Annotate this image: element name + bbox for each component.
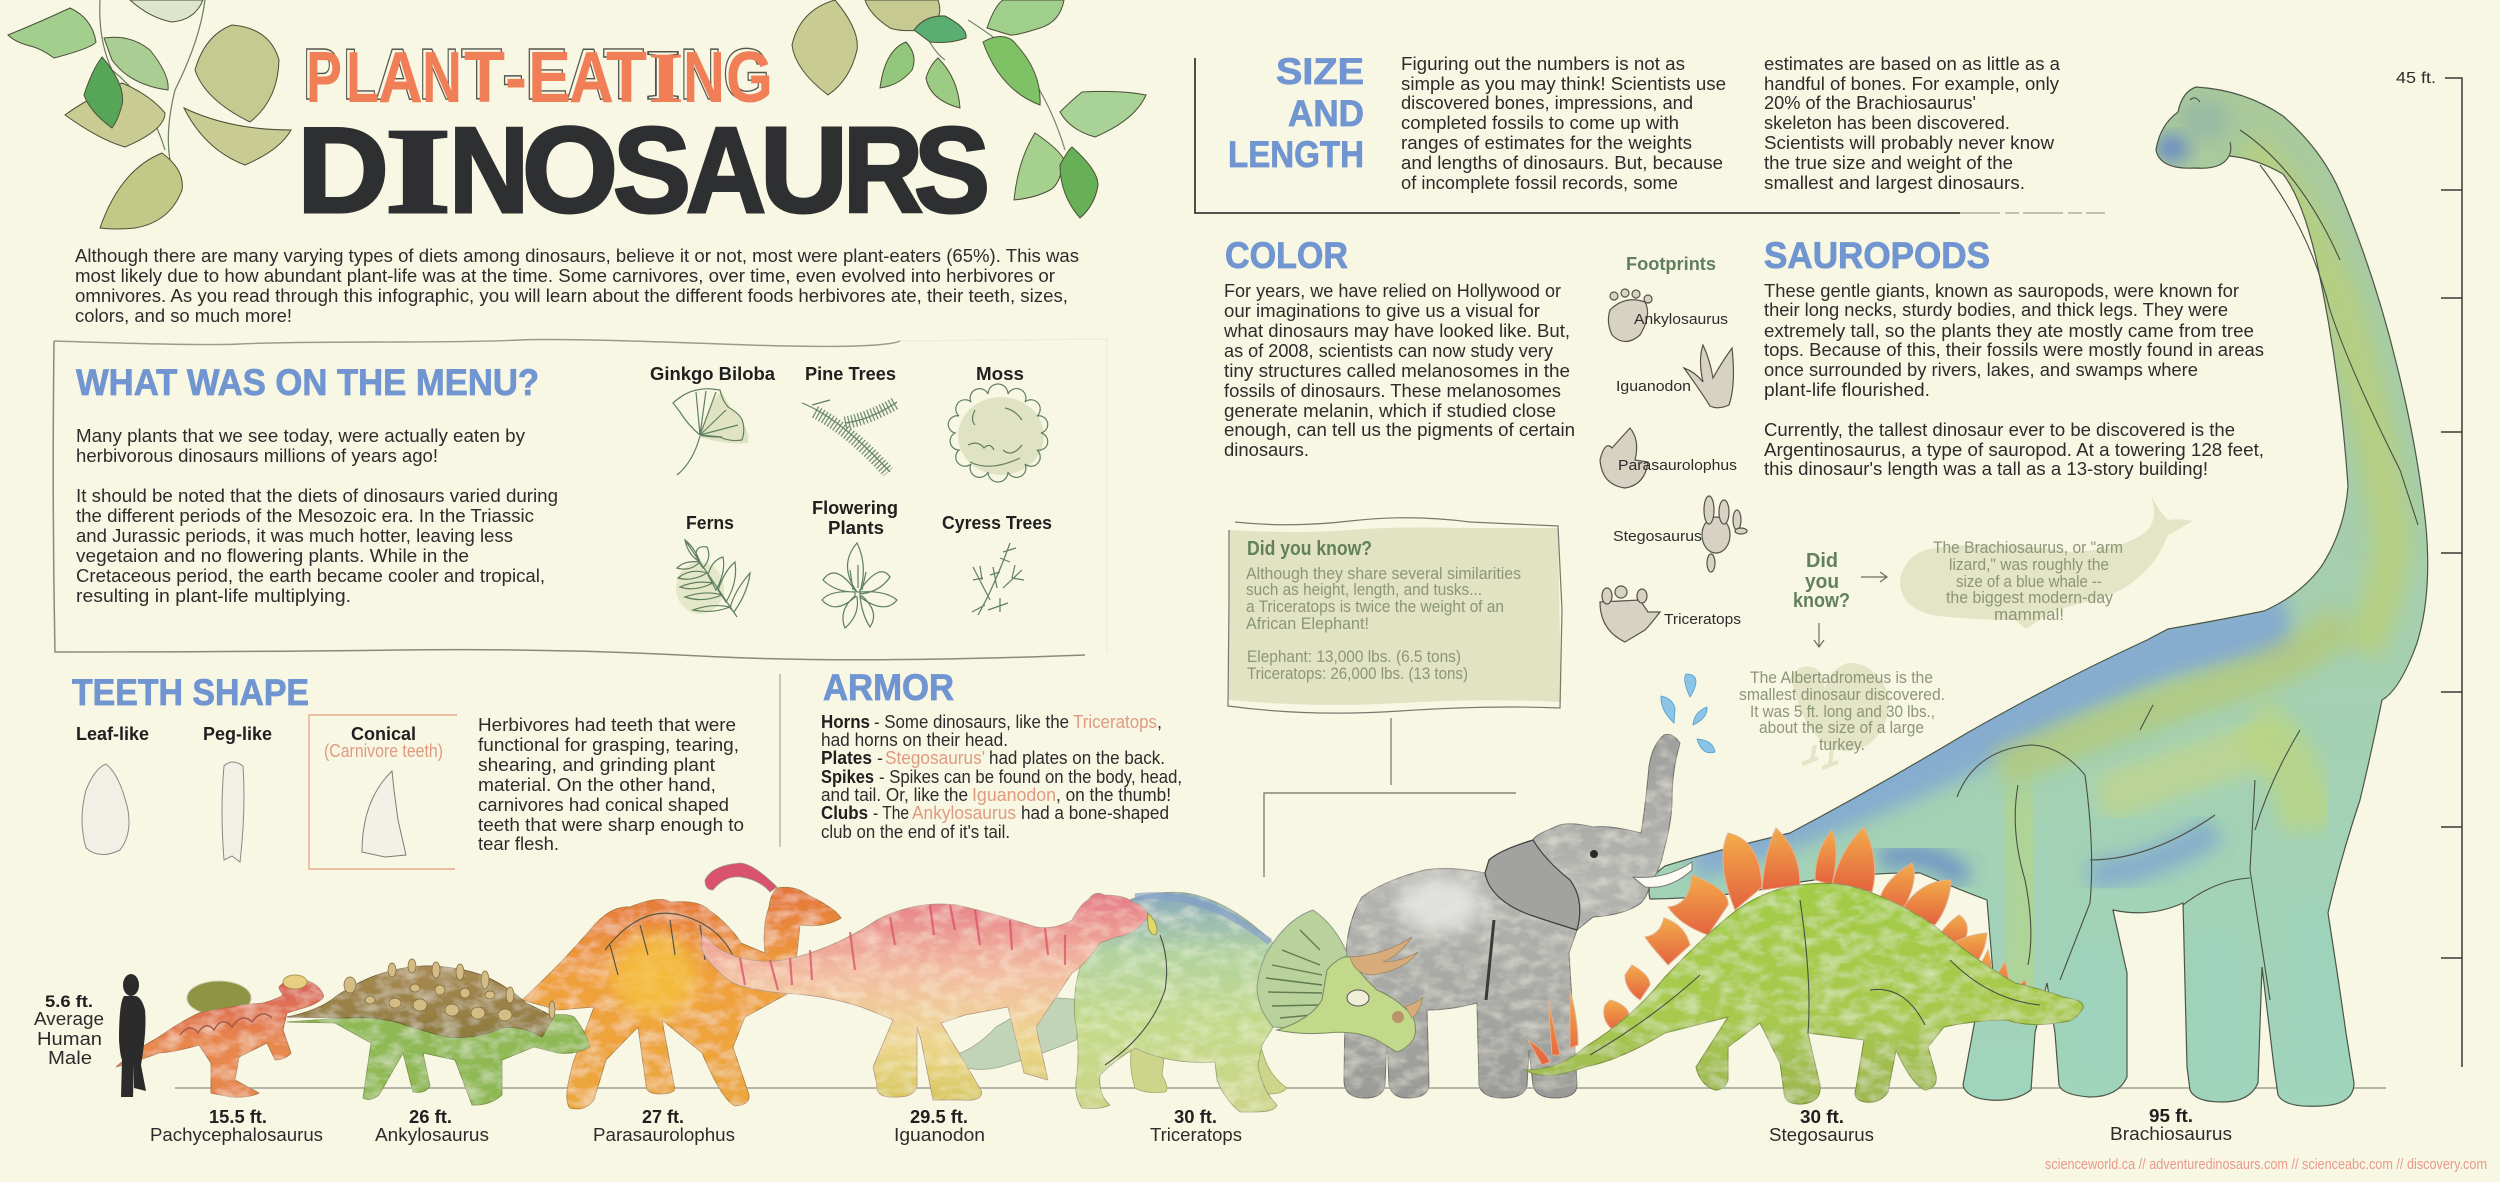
- armor text: Stegosaurus': [885, 748, 985, 768]
- armor text: Iguanodon: [972, 785, 1056, 805]
- heading: size and length: SIZE: [1276, 51, 1364, 92]
- fact: whale: the biggest modern-day: [1946, 589, 2114, 607]
- ground line: [175, 1087, 2386, 1089]
- tooth: peg-like: [203, 724, 272, 862]
- tooth: conical with box: (Carnivore teeth): [324, 741, 443, 761]
- fact: turkey: [1739, 663, 1945, 768]
- color text: [1223, 281, 1575, 460]
- human silhouette: [119, 974, 146, 1097]
- title: Plant-Eating: N: [419, 35, 459, 115]
- label: iguanodon: 29.5 ft.: [910, 1107, 968, 1127]
- labels: human height: Human: [37, 1029, 102, 1049]
- tooth: conical with box: [309, 715, 457, 869]
- fact: did you know label: you: [1805, 571, 1839, 593]
- intro paragraph: colors, and so much more!: [75, 306, 292, 326]
- callout: did you know elephant vs triceratops: African Elephant!: [1246, 615, 1369, 633]
- dinosaur: iguanodon: [702, 893, 1157, 1100]
- label: parasaurolophus: Parasaurolophus: [593, 1125, 735, 1145]
- sauropods text: their long necks, sturdy bodies, and thick legs. They were: [1764, 300, 2228, 320]
- teeth text: material. On the other hand,: [478, 775, 716, 795]
- plant: moss: Moss: [976, 364, 1024, 384]
- title: Plant-Eating: I: [645, 35, 681, 115]
- armor text: -: [877, 748, 883, 768]
- plant: ginkgo biloba: [650, 364, 776, 475]
- armor text: club on the end of it's tail.: [821, 822, 1010, 842]
- label: brachiosaurus: [2110, 1106, 2232, 1144]
- sauropods text: once surrounded by rivers, lakes, and swamps where: [1764, 360, 2198, 380]
- fact: whale: mammal!: [1994, 606, 2064, 624]
- panel: what was on the menu: [53, 339, 1107, 660]
- footprint: iguanodon: [1616, 345, 1733, 408]
- dinosaur: stegosaurus: [1525, 827, 2083, 1104]
- armor text: Ankylosaurus: [912, 803, 1016, 823]
- size text column 2: skeleton has been discovered.: [1764, 113, 2010, 133]
- armor text: had plates on the back.: [989, 748, 1165, 768]
- menu text: the different periods of the Mesozoic era. In the Triassic: [76, 506, 534, 526]
- plant: pine trees: [802, 364, 897, 472]
- title: Plant-Eating: A: [375, 35, 420, 115]
- tooth: leaf-like: Leaf-like: [76, 724, 149, 744]
- color text: our imaginations to give us a visual for: [1224, 301, 1540, 321]
- tooth: peg-like: Peg-like: [203, 724, 272, 744]
- size text column 2: Scientists will probably never know: [1764, 133, 2055, 153]
- title: Plant-Eating: G: [723, 35, 770, 115]
- callout: did you know elephant vs triceratops: such as height, length, and tusks...: [1246, 581, 1482, 599]
- armor text: - Some dinosaurs, like the: [874, 712, 1069, 732]
- callout: did you know elephant vs triceratops: [1228, 518, 1562, 713]
- size text column 2: the true size and weight of the: [1764, 153, 2013, 173]
- size text column 2: handful of bones. For example, only: [1764, 74, 2059, 94]
- footprint: ankylosaurus: Ankylosaurus: [1634, 311, 1728, 328]
- label: ankylosaurus: [375, 1107, 489, 1145]
- size text column 2: smallest and largest dinosaurs.: [1764, 173, 2025, 193]
- fact: did you know label: Did: [1806, 550, 1838, 572]
- footprint: stegosaurus: [1613, 496, 1747, 572]
- leaves: top right foliage: [792, 0, 1146, 218]
- title: Dinosaurs: N: [449, 102, 529, 238]
- title: Dinosaurs: I: [385, 104, 451, 239]
- teeth text: teeth that were sharp enough to: [478, 815, 744, 835]
- title: Plant-Eating: L: [346, 38, 379, 118]
- sauropods text: [1764, 281, 2264, 479]
- ankylosaurus shell: [287, 966, 554, 1038]
- panel: size and length: [1195, 51, 2105, 213]
- size text column 1: of incomplete fossil records, some: [1401, 173, 1678, 193]
- triceratops tail: [949, 997, 1085, 1069]
- size text column 1: ranges of estimates for the weights: [1401, 133, 1692, 153]
- armor text: ,: [1157, 712, 1162, 732]
- teeth text: functional for grasping, tearing,: [478, 735, 739, 755]
- heading: size and length: [1228, 51, 1364, 175]
- iguanodon beak: [1148, 913, 1157, 935]
- title: Plant-Eating: A: [566, 35, 611, 115]
- title: Plant-Eating: P: [303, 35, 339, 115]
- size text column 1: [1401, 54, 1726, 193]
- label: ankylosaurus: 26 ft.: [409, 1107, 452, 1127]
- callout: did you know elephant vs triceratops: Although they share several similarities: [1246, 565, 1521, 583]
- dinosaur: parasaurolophus: [522, 863, 841, 1109]
- fact: turkey: about the size of a large: [1759, 719, 1924, 737]
- title: Dinosaurs: R: [843, 102, 923, 238]
- fact: did you know label: [1793, 550, 1850, 612]
- menu text: vegetaion and no flowering plants. While in the: [76, 546, 469, 566]
- fact: whale: [1900, 495, 2193, 629]
- tooth: conical with box: Conical: [351, 724, 416, 744]
- fact: turkey: smallest dinosaur discovered.: [1739, 686, 1945, 704]
- sauropods text: tops. Because of this, their fossils were mostly found in areas: [1764, 340, 2264, 360]
- dinosaur: pachycephalosaurus: [116, 975, 324, 1097]
- arrow: to whale fact: [1861, 572, 1887, 582]
- plant: flowering plants: Flowering: [812, 498, 898, 518]
- label: parasaurolophus: 27 ft.: [642, 1107, 684, 1127]
- armor text: and tail. Or, like the: [821, 785, 968, 805]
- armor text: [821, 712, 1182, 842]
- dinosaur: ankylosaurus: [287, 959, 590, 1105]
- armor text: Plates: [821, 748, 872, 768]
- footprint: triceratops: Triceratops: [1664, 611, 1741, 628]
- label: triceratops: 30 ft.: [1174, 1107, 1217, 1127]
- panel: footprints: Footprints: [1626, 254, 1716, 274]
- title: Plant-Eating: -: [505, 38, 527, 118]
- title: Dinosaurs: D: [297, 102, 389, 238]
- labels: human height: Male: [48, 1048, 92, 1068]
- triceratops far legs: [1131, 1045, 1287, 1094]
- stegosaurus plates: [1528, 827, 2028, 1065]
- fact: turkey: turkey.: [1819, 736, 1865, 754]
- title: Plant-Eating: T: [603, 35, 644, 115]
- menu text: [76, 426, 558, 606]
- footprint: stegosaurus: Stegosaurus: [1613, 528, 1702, 545]
- label: pachycephalosaurus: Pachycephalosaurus: [150, 1125, 323, 1145]
- title: Plant-Eating: A: [569, 38, 614, 118]
- footprint: parasaurolophus: [1600, 428, 1737, 488]
- callout: did you know elephant vs triceratops: a Triceratops is twice the weight of an: [1246, 598, 1504, 616]
- teeth text: shearing, and grinding plant: [478, 755, 715, 775]
- label: triceratops: [1150, 1107, 1242, 1145]
- armor text: Spikes: [821, 767, 874, 787]
- sauropods text: These gentle giants, known as sauropods, were known for: [1764, 281, 2239, 301]
- sauropods text: extremely tall, so the plants they ate mostly came from tree: [1764, 321, 2254, 341]
- fact: did you know label: know?: [1793, 590, 1850, 612]
- dinosaur: brachiosaurus: [1649, 87, 2428, 1106]
- title: Plant-Eating: T: [464, 38, 505, 118]
- fact: whale: size of a blue whale --: [1956, 573, 2102, 591]
- title: Plant-Eating: A: [378, 38, 423, 118]
- heading: armor: ARMOR: [823, 667, 954, 708]
- armor text: Horns: [821, 712, 870, 732]
- heading: color: COLOR: [1225, 235, 1348, 276]
- armor text: , on the thumb!: [1056, 785, 1171, 805]
- teeth text: carnivores had conical shaped: [478, 795, 729, 815]
- title: Dinosaurs: U: [760, 102, 848, 238]
- intro paragraph: most likely due to how abundant plant-life was at the time. Some carnivores, over time, even evolved into herbivores or: [75, 266, 1055, 286]
- parasaurolophus crest: [705, 863, 777, 892]
- title: Plant-Eating: T: [606, 38, 647, 118]
- teeth text: tear flesh.: [478, 834, 559, 854]
- height scale: 45 ft.: [2396, 70, 2436, 87]
- title: Plant-Eating: E: [528, 38, 571, 118]
- title: Plant-Eating: I: [648, 38, 684, 118]
- size text column 2: estimates are based on as little as a: [1764, 54, 2061, 74]
- label: iguanodon: Iguanodon: [894, 1125, 985, 1145]
- sauropods text: Argentinosaurus, a type of sauropod. At a towering 128 feet,: [1764, 440, 2264, 460]
- labels: human height: Average: [34, 1009, 104, 1029]
- label: stegosaurus: [1769, 1107, 1874, 1145]
- title: Plant-Eating: N: [680, 35, 722, 115]
- title: Plant-Eating: G: [726, 38, 773, 118]
- title: Plant-Eating: [303, 35, 773, 118]
- panel: color: [1223, 235, 1575, 460]
- dinosaur: triceratops: [949, 892, 1423, 1112]
- sauropods text: Currently, the tallest dinosaur ever to be discovered is the: [1764, 420, 2235, 440]
- footprint: triceratops: [1600, 586, 1741, 642]
- footprint: iguanodon: Iguanodon: [1616, 378, 1691, 395]
- triceratops head: [1277, 957, 1416, 1052]
- leaves: top left foliage: [8, 0, 291, 229]
- color text: what dinosaurs may have looked like. But,: [1223, 321, 1570, 341]
- size text column 1: discovered bones, impressions, and: [1401, 93, 1693, 113]
- label: triceratops: Triceratops: [1150, 1125, 1242, 1145]
- plant: cypress trees: [942, 513, 1052, 615]
- sauropods text: this dinosaur's length was a tall as a 13-story building!: [1764, 459, 2208, 479]
- label: stegosaurus: Stegosaurus: [1769, 1125, 1874, 1145]
- menu text: herbivorous dinosaurs millions of years ago!: [76, 446, 438, 466]
- title: Dinosaurs: S: [914, 102, 990, 238]
- menu text: resulting in plant-life multiplying.: [76, 586, 351, 606]
- armor text: - The: [873, 803, 909, 823]
- label: pachycephalosaurus: 15.5 ft.: [209, 1107, 267, 1127]
- callout: did you know elephant vs triceratops: Did you know?: [1247, 538, 1372, 560]
- label: brachiosaurus: Brachiosaurus: [2110, 1124, 2232, 1144]
- plant: ginkgo biloba: Ginkgo Biloba: [650, 364, 776, 384]
- label: ankylosaurus: Ankylosaurus: [375, 1125, 489, 1145]
- menu text: It should be noted that the diets of dinosaurs varied during: [76, 486, 558, 506]
- size text column 1: and lengths of dinosaurs. But, because: [1401, 153, 1723, 173]
- panel: armor: [821, 667, 1182, 842]
- title: Plant-Eating: N: [422, 38, 462, 118]
- color text: For years, we have relied on Hollywood or: [1224, 281, 1561, 301]
- intro paragraph: [75, 246, 1079, 326]
- heading: teeth shape: TEETH SHAPE: [72, 672, 309, 713]
- heading: size and length: LENGTH: [1228, 134, 1364, 175]
- title: Dinosaurs: S: [613, 102, 691, 238]
- menu text: and Jurassic periods, it was much hotter, leaving less: [76, 526, 513, 546]
- sauropods text: plant-life flourished.: [1764, 380, 1930, 400]
- heading: sauropods: SAUROPODS: [1764, 235, 1990, 276]
- fact: turkey: The Albertadromeus is the: [1750, 669, 1933, 687]
- title: Plant-Eating: N: [683, 38, 725, 118]
- triceratops horns: [1350, 937, 1423, 1018]
- title: Plant-Eating: L: [343, 35, 376, 115]
- panel: footprints: [1600, 254, 1747, 642]
- fact: turkey: It was 5 ft. long and 30 lbs.,: [1750, 703, 1935, 721]
- height scale: [2396, 70, 2462, 1067]
- elephant ear: [1485, 840, 1580, 930]
- labels: human height: [34, 992, 104, 1068]
- teeth text: [478, 715, 744, 854]
- arrow: to turkey fact: [1814, 623, 1824, 647]
- label: stegosaurus: 30 ft.: [1800, 1107, 1844, 1127]
- heading: size and length: AND: [1288, 93, 1364, 134]
- teeth text: Herbivores had teeth that were: [478, 715, 736, 735]
- title: Plant-Eating: E: [525, 35, 568, 115]
- label: parasaurolophus: [593, 1107, 735, 1145]
- title: Plant-Eating: T: [461, 35, 502, 115]
- color text: tiny structures called melanosomes in the: [1224, 361, 1570, 381]
- label: brachiosaurus: 95 ft.: [2149, 1106, 2193, 1126]
- armor text: Triceratops: [1073, 712, 1157, 732]
- plant: moss: [948, 364, 1048, 482]
- fact: whale: The Brachiosaurus, or "arm: [1933, 539, 2123, 557]
- armor text: - Spikes can be found on the body, head,: [879, 767, 1182, 787]
- size text column 1: Figuring out the numbers is not as: [1401, 54, 1685, 74]
- plant: cypress trees: Cyress Trees: [942, 513, 1052, 533]
- armor text: had a bone-shaped: [1021, 803, 1169, 823]
- callout: did you know elephant vs triceratops: Triceratops: 26,000 lbs. (13 tons): [1247, 665, 1468, 683]
- callout: did you know elephant vs triceratops: Elephant: 13,000 lbs. (6.5 tons): [1247, 648, 1461, 666]
- triceratops frill: [1257, 910, 1347, 1028]
- color text: as of 2008, scientists can now study very: [1224, 341, 1553, 361]
- plant: pine trees: Pine Trees: [805, 364, 896, 384]
- menu text: Many plants that we see today, were actually eaten by: [76, 426, 525, 446]
- title: Plant-Eating: -: [502, 35, 524, 115]
- size text column 1: completed fossils to come up with: [1401, 113, 1679, 133]
- plant: ferns: Ferns: [686, 513, 734, 533]
- menu text: Cretaceous period, the earth became cooler and tropical,: [76, 566, 545, 586]
- title: Plant-Eating: P: [306, 38, 342, 118]
- footprint: ankylosaurus: [1608, 289, 1728, 342]
- size text column 1: simple as you may think! Scientists use: [1401, 74, 1726, 94]
- intro paragraph: Although there are many varying types of diets among dinosaurs, believe it or not, most were plant-eaters (65%). This was: [75, 246, 1079, 266]
- dinosaur: elephant: [1344, 734, 1692, 1098]
- title: Dinosaurs: O: [522, 102, 618, 238]
- armor text: had horns on their head.: [821, 730, 1008, 750]
- size text column 2: 20% of the Brachiosaurus': [1764, 93, 1976, 113]
- size text column 2: [1764, 54, 2061, 193]
- armor text: Clubs: [821, 803, 868, 823]
- color text: enough, can tell us the pigments of certain: [1224, 420, 1575, 440]
- panel: sauropods: [1764, 235, 2264, 479]
- label: iguanodon: [894, 1107, 985, 1145]
- label: pachycephalosaurus: [150, 1107, 323, 1145]
- labels: human height: 5.6 ft.: [45, 992, 93, 1011]
- plant: flowering plants: Plants: [828, 518, 884, 538]
- plant: flowering plants: [812, 498, 898, 628]
- panel: teeth shape: [72, 672, 744, 869]
- heading: what was on the menu: WHAT WAS ON THE MENU?: [76, 362, 539, 403]
- intro paragraph: omnivores. As you read through this infographic, you will learn about the different foods herbivores ate, their teeth, sizes,: [75, 286, 1068, 306]
- color text: generate melanin, which if studied close: [1224, 401, 1556, 421]
- elephant tusk: [1633, 862, 1692, 887]
- title: Dinosaurs: A: [686, 102, 766, 238]
- title: Dinosaurs: [297, 102, 990, 239]
- color text: fossils of dinosaurs. These melanosomes: [1224, 381, 1561, 401]
- water drops: [1661, 674, 1715, 753]
- fact: whale: lizard," was roughly the: [1949, 556, 2109, 574]
- plant: ferns: [676, 513, 750, 617]
- footprint: parasaurolophus: Parasaurolophus: [1618, 457, 1737, 474]
- tooth: leaf-like: [76, 724, 149, 855]
- color text: dinosaurs.: [1224, 440, 1309, 460]
